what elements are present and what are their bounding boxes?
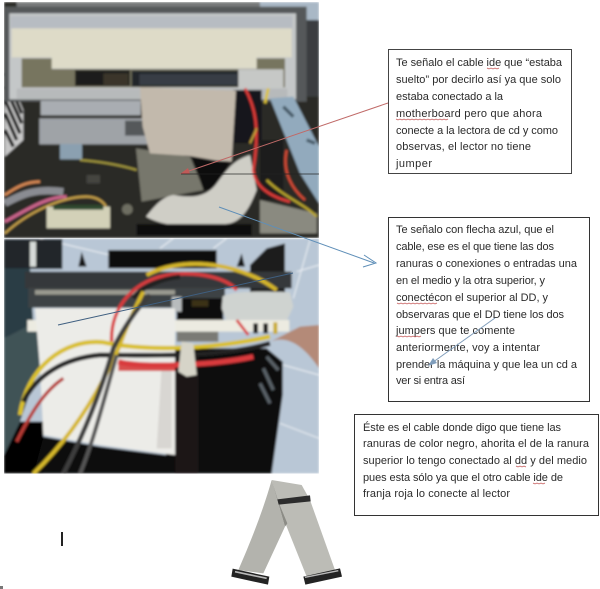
divider line in photo — [181, 173, 319, 175]
callout: second note: conectécon el superior al DD, y — [396, 292, 548, 304]
callout: first note — [388, 50, 572, 174]
callout: third note: pues esta sólo ya que el otro cable ide de — [363, 472, 563, 484]
stray mark — [0, 586, 3, 589]
callout: first note: jumper — [395, 158, 432, 170]
callout: third note: Éste es el cable donde digo que tiene las — [363, 421, 562, 434]
arrow: blue pointer to the cable connection — [219, 207, 376, 267]
callout: third note: superior lo tengo conectado al dd y del medio — [363, 455, 587, 467]
callout: second note: prender la máquina y que lea un cd a — [396, 359, 578, 371]
photo: CD drive with IDE ribbon cable — [4, 2, 319, 238]
callout: first note: suelto” por decirlo así ya que solo — [396, 74, 561, 86]
arrow: blue pointer on hard disk cable — [58, 273, 293, 325]
callout: second note — [388, 218, 590, 402]
callout: second note: anteriormente, voy a intentar — [396, 342, 540, 354]
callout: third note — [354, 414, 598, 516]
arrow: red pointer from first note to the cable — [180, 103, 388, 174]
callout: second note: observaras que el DD tiene los dos — [396, 309, 564, 321]
photo: hard disk with ribbon cable and power wires — [4, 238, 319, 474]
callout: first note: observas, el lector no tiene — [396, 141, 531, 153]
callout: first note: conecte a la lectora de cd y como — [396, 125, 558, 137]
text cursor mark — [61, 532, 63, 546]
callout: first note: estaba conectado a la — [396, 91, 504, 103]
callout: second note: ver si entra así — [396, 375, 465, 387]
callout: first note: Te señalo el cable ide que “estaba — [396, 57, 563, 69]
callout: second note: en el medio y la otra superior, y — [396, 275, 546, 287]
arrow: blue pointer across second note — [428, 318, 495, 366]
callout: third note: ranuras de color negro, ahorita el de la ranura — [363, 438, 590, 450]
callout: second note: Te señalo con flecha azul, que el — [396, 224, 554, 236]
callout: second note: cable, ese es el que tiene las dos — [396, 241, 554, 253]
icon: grey IDE ribbon cable — [231, 480, 342, 585]
callout: third note: franja roja lo conecte al lector — [363, 488, 510, 500]
callout: first note: motherboard pero que ahora — [396, 108, 543, 120]
callout: second note: ranuras o conexiones o entradas una — [396, 258, 578, 270]
callout: second note: jumpers que te comente — [395, 325, 515, 337]
